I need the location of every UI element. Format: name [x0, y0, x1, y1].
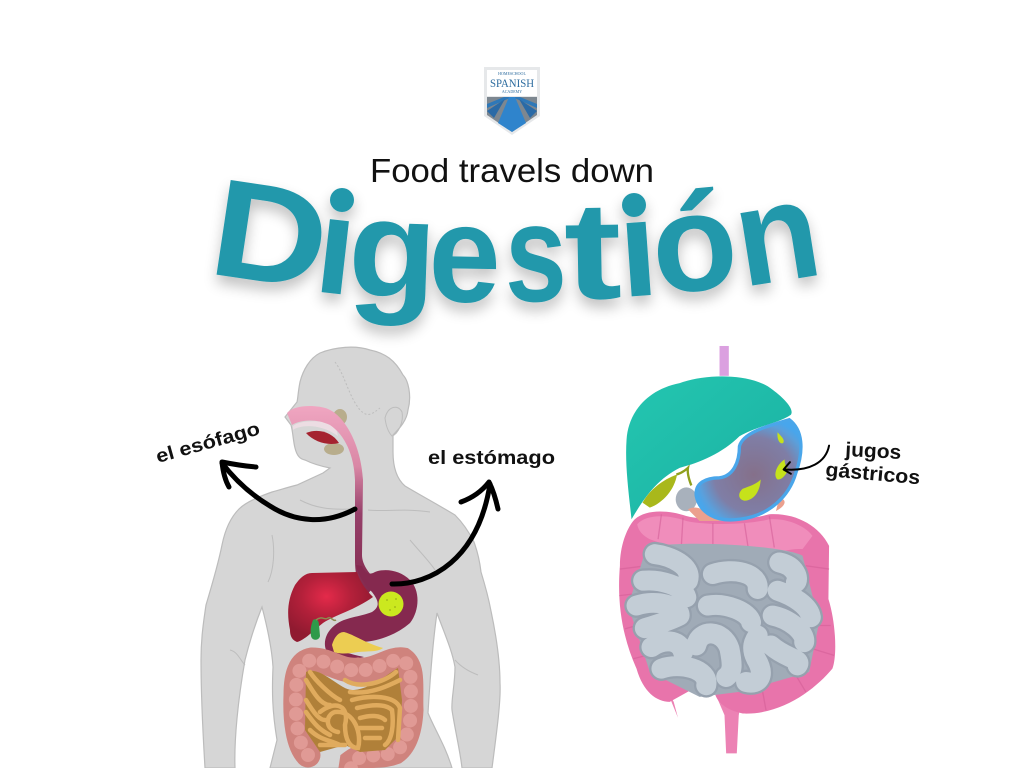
label: jugos gástricos [825, 439, 921, 489]
rectum and appendix [665, 685, 743, 753]
title: Digestión: ó [645, 162, 743, 324]
colon segments [619, 514, 834, 710]
label: jugos gástricos: gástricos [825, 459, 921, 489]
title: Digestión [211, 180, 822, 341]
gastric juice blob [378, 592, 404, 616]
small intestine [305, 668, 402, 752]
label: el estómago: el estómago [428, 448, 555, 469]
liver [288, 572, 373, 642]
label: el esófago: el esófago [154, 419, 262, 468]
title: Digestión: g [346, 171, 440, 328]
title: Digestión: s [505, 175, 567, 331]
arrow: to el esófago [222, 462, 355, 520]
stomach [696, 420, 801, 520]
title: Digestión: i [309, 167, 365, 325]
logo text: SPANISH [490, 76, 534, 90]
title: Digestión: i [613, 170, 663, 327]
large intestine [296, 660, 411, 768]
stomach [325, 565, 418, 660]
esophagus [287, 406, 378, 597]
arrow: to el estómago [392, 482, 498, 584]
logo text [490, 71, 534, 94]
esophagus tube [720, 346, 729, 376]
duodenum and pancreas [676, 487, 785, 521]
title: Digestión: D [202, 148, 339, 319]
logo: Homeschool Spanish Academy shield [484, 67, 540, 135]
logo text: HOMESCHOOL [498, 71, 526, 76]
transverse colon highlight [637, 516, 812, 559]
title: Digestión: e [427, 176, 502, 332]
body silhouette [201, 347, 500, 768]
arrow: to gastric juices [784, 446, 829, 474]
title: Digestión: n [723, 150, 830, 317]
body contour details [230, 362, 478, 675]
subtitle: Food travels down: Food travels down [370, 152, 654, 189]
liver [626, 376, 792, 519]
colon [619, 511, 835, 714]
logo text: ACADEMY [502, 89, 522, 94]
label: jugos gástricos: jugos [844, 439, 902, 464]
glands [324, 409, 347, 455]
small intestine [628, 544, 819, 697]
gallbladder [642, 468, 691, 508]
mouth and tongue [293, 421, 338, 436]
gastric juice drops [739, 432, 789, 501]
gallbladder [311, 618, 336, 640]
title: Digestión: t [563, 173, 623, 329]
figure: human body with digestive organs [201, 347, 500, 768]
pancreas [332, 632, 383, 654]
figure: 3D digestive organs [619, 346, 835, 753]
